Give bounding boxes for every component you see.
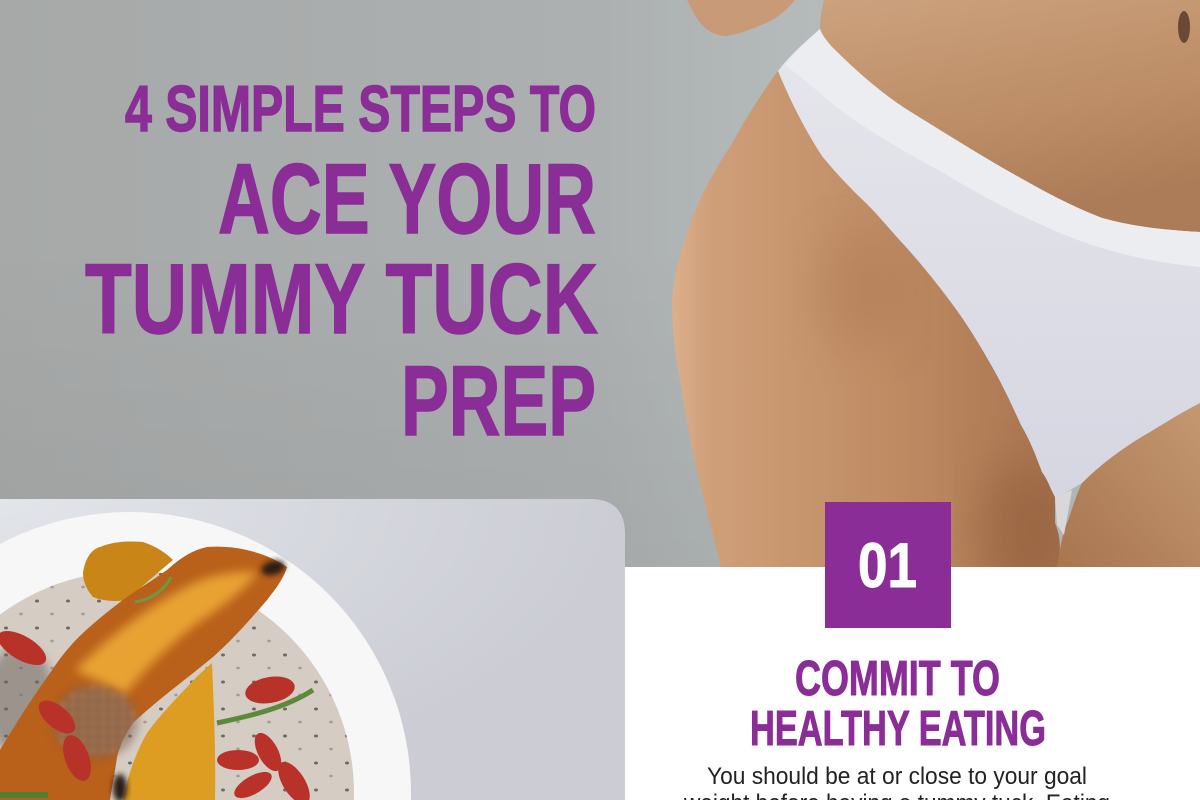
title <box>85 72 598 456</box>
step number badge <box>825 502 951 628</box>
title: TUMMY TUCK <box>85 243 598 354</box>
step body text: You should be at or close to your goal <box>707 763 1087 790</box>
title: PREP <box>401 345 596 456</box>
title: ACE YOUR <box>218 143 596 254</box>
step body text <box>683 763 1110 800</box>
step number badge: 01 <box>858 531 917 601</box>
photo: food on marble <box>0 499 625 800</box>
step heading: HEALTHY EATING <box>750 702 1046 756</box>
panel: step 01 <box>625 502 1200 800</box>
title: 4 SIMPLE STEPS TO <box>125 72 596 145</box>
step heading <box>750 652 1046 756</box>
step heading: COMMIT TO <box>795 652 1000 706</box>
photo: body <box>672 0 1200 600</box>
